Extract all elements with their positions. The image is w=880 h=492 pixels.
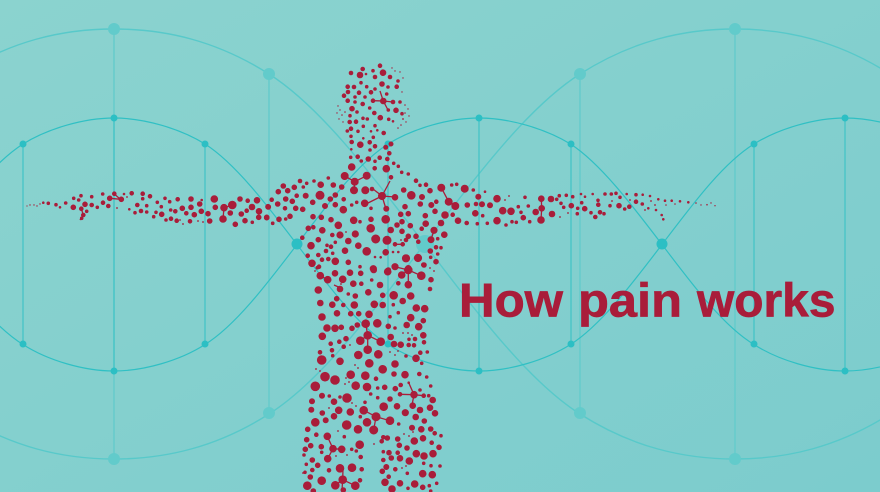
title: works <box>696 274 836 328</box>
small DNA helix <box>0 114 880 374</box>
connecting strands <box>80 91 542 490</box>
human figure made of dots <box>27 64 715 492</box>
title <box>459 274 836 328</box>
head <box>337 64 409 128</box>
left arm <box>27 191 274 227</box>
title: pain <box>578 274 682 328</box>
title: How <box>459 274 564 328</box>
hips and legs <box>302 382 442 492</box>
neck <box>346 127 395 165</box>
right arm <box>495 192 715 226</box>
torso <box>264 164 500 385</box>
